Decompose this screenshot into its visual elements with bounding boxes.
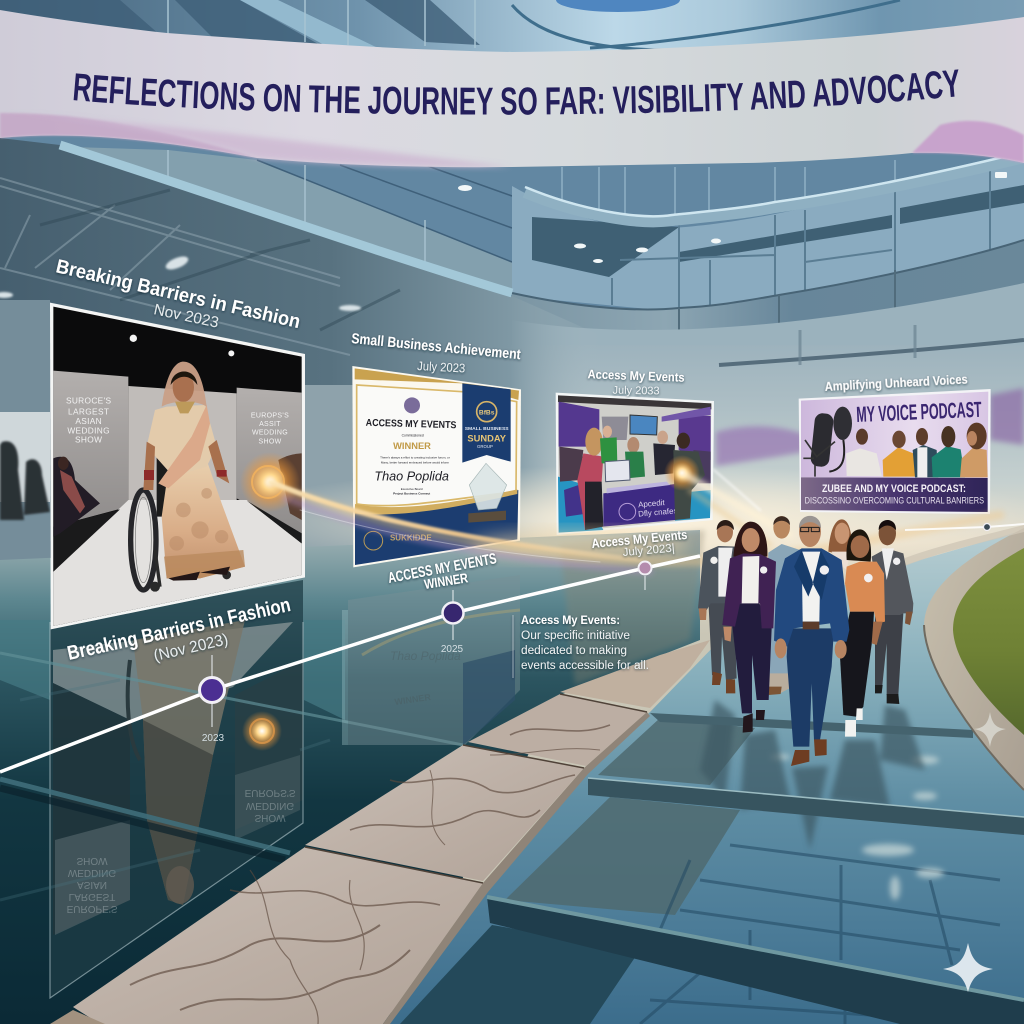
winner ribbon xyxy=(462,383,511,463)
microphone xyxy=(803,407,852,477)
label: access my events floor: Access My Events xyxy=(591,527,688,551)
wall signs: SUROCE'S xyxy=(66,395,111,405)
reflection of fashion panel: SHOW xyxy=(76,855,108,866)
label: breaking barriers floor: (Nov 2023) xyxy=(152,631,230,665)
booth floor xyxy=(558,477,711,533)
label: small business achievement: July 2023 xyxy=(417,359,466,376)
ribbon text: SUNDAY xyxy=(467,434,507,444)
haze light over horizon xyxy=(220,388,1024,575)
callout: access my events: Our specific initiative xyxy=(521,630,630,642)
people reflections xyxy=(700,700,925,850)
right glass floor xyxy=(385,530,1024,1024)
label: access my events xyxy=(587,367,685,397)
label: access my events floor: July 2023| xyxy=(622,542,675,559)
reflection of award and booth panels: Thao Poplida xyxy=(390,649,461,663)
lens flare on booth panel xyxy=(664,455,700,491)
heading: breaking barriers: Breaking Barriers in Fashion xyxy=(54,255,302,333)
banner xyxy=(0,10,1024,171)
label: access my events: July 2033 xyxy=(612,385,660,397)
reflection of award and booth panels: WINNER xyxy=(394,692,432,707)
certificate text xyxy=(366,418,457,496)
ribbon text: BfBs xyxy=(479,409,495,416)
light beams xyxy=(270,470,1000,572)
milestone podcast xyxy=(984,524,990,530)
callout: access my events: dedicated to making xyxy=(521,645,627,657)
panel frame xyxy=(50,303,305,629)
reflection of award and booth panels xyxy=(345,530,705,745)
certificate text: Thao Poplida xyxy=(374,470,449,484)
reflection of fashion panel: EUROPS'S xyxy=(245,787,296,798)
wall signs: SHOW xyxy=(75,435,102,445)
booth banners xyxy=(559,402,599,447)
podcast caption xyxy=(801,477,988,512)
left truss hall xyxy=(0,138,600,560)
glass panes reflecting marble xyxy=(505,718,755,915)
booth table xyxy=(603,484,675,527)
footer logo: SUKKIDDE xyxy=(390,534,432,543)
label: access my events: Access My Events xyxy=(587,367,685,385)
panel: podcast: ZUBEE AND MY VOICE PODCAST: xyxy=(822,483,966,495)
label: access my events winner: WINNER xyxy=(423,570,469,592)
ribbon text: SMALL BUSINESS xyxy=(465,426,509,432)
podcast guests xyxy=(846,423,988,477)
flare on floor xyxy=(242,711,282,751)
window reflections xyxy=(640,845,1000,1024)
wall signs: SHOW xyxy=(258,438,282,445)
milestone 2025: 2025 xyxy=(441,644,464,655)
reflection of fashion panel xyxy=(50,580,303,998)
certificate text: WINNER xyxy=(393,441,431,451)
certificate text: Commissioned xyxy=(402,434,424,438)
label: small business achievement: Small Business Achievement xyxy=(351,331,522,363)
milestone access my events xyxy=(638,562,652,574)
person: man in blue suit xyxy=(774,516,849,766)
sparkle: corner xyxy=(943,943,993,992)
ribbon text: GROUP xyxy=(477,444,493,449)
booth text: Dfly cnafes xyxy=(638,506,678,519)
callout: access my events: events accessible for all. xyxy=(521,660,649,672)
award frame xyxy=(352,366,521,567)
banner title: REFLECTIONS ON THE JOURNEY SO FAR: VISIBILITY AND ADVOCACY xyxy=(74,69,958,115)
glass frame bars xyxy=(650,713,973,738)
audience xyxy=(53,453,302,537)
person: woman in orange xyxy=(840,529,885,737)
lens flare on fashion panel xyxy=(240,452,300,512)
milestone 2023: 2023 xyxy=(202,733,225,744)
grass lawn with stone curb xyxy=(905,525,1024,790)
wall signs: WEDDING xyxy=(252,430,288,437)
person: back man xyxy=(767,516,803,695)
cloud glints xyxy=(770,754,944,900)
certificate text: Project Business Connect xyxy=(393,492,430,496)
reflection of fashion panel: WEDDING xyxy=(246,800,294,811)
booth text: Apcedit xyxy=(638,498,666,509)
stage backdrop xyxy=(53,307,302,626)
certificate text: Many, better forward embraced before would inform xyxy=(381,460,450,464)
person: woman in purple xyxy=(722,522,776,733)
label: small business achievement xyxy=(351,331,522,376)
wall signs: WEDDING xyxy=(67,425,110,435)
screen xyxy=(630,415,657,435)
label: access my events winner: ACCESS MY EVENTS xyxy=(387,550,498,587)
panel: fashion xyxy=(50,303,305,629)
certificate text: ACCESS MY EVENTS xyxy=(366,418,457,431)
label: breaking barriers floor: Breaking Barriers in Fashion xyxy=(65,594,293,665)
reflection of fashion panel: EUROPE'S xyxy=(67,903,118,914)
sparkle: lawn xyxy=(974,712,1006,747)
label: amplifying unheard voices: Amplifying Unheard Voices xyxy=(824,373,968,394)
marble walkway xyxy=(50,640,710,1024)
certificate text: Executive Board xyxy=(401,487,423,491)
booth staff xyxy=(577,426,705,530)
glass bars left xyxy=(0,653,463,900)
reflection of fashion panel: LARGEST xyxy=(69,891,115,902)
timeline xyxy=(0,524,1024,772)
label: access my events winner xyxy=(387,550,498,592)
callout: access my events xyxy=(513,615,649,678)
brain logo xyxy=(404,397,420,413)
heading: breaking barriers: Nov 2023 xyxy=(152,301,220,332)
certificate text: There's always a effort to creating inclusive forum, or xyxy=(380,456,450,460)
reflection of fashion panel: SHOW xyxy=(254,812,286,823)
crowd behind xyxy=(559,417,711,483)
callout: access my events: Access My Events: xyxy=(521,615,620,627)
wall signs xyxy=(66,395,289,445)
person: right man xyxy=(872,520,913,704)
panel: podcast xyxy=(799,389,991,514)
panel: award xyxy=(352,366,521,567)
person: back woman xyxy=(828,519,852,570)
glass trophy xyxy=(469,463,507,510)
left glass floor xyxy=(0,530,700,1024)
ribbon text xyxy=(465,402,509,449)
booth text xyxy=(619,498,678,520)
milestone 2025 xyxy=(441,602,464,655)
footer logo xyxy=(364,531,432,550)
wall signs: ASIAN xyxy=(75,416,102,426)
wall signs: ASSIT xyxy=(259,421,281,428)
team of six xyxy=(698,516,913,766)
label: access my events floor xyxy=(591,527,688,559)
panel: booth xyxy=(556,393,714,535)
reflection of fashion panel: ASIAN xyxy=(77,879,107,890)
model in wheelchair xyxy=(131,362,245,592)
milestone 2023 xyxy=(200,678,225,744)
person: left man xyxy=(698,520,737,693)
wall signs: LARGEST xyxy=(68,406,109,416)
reflection of fashion panel: WEDDING xyxy=(68,867,116,878)
wall signs: EUROPS'S xyxy=(251,412,289,419)
